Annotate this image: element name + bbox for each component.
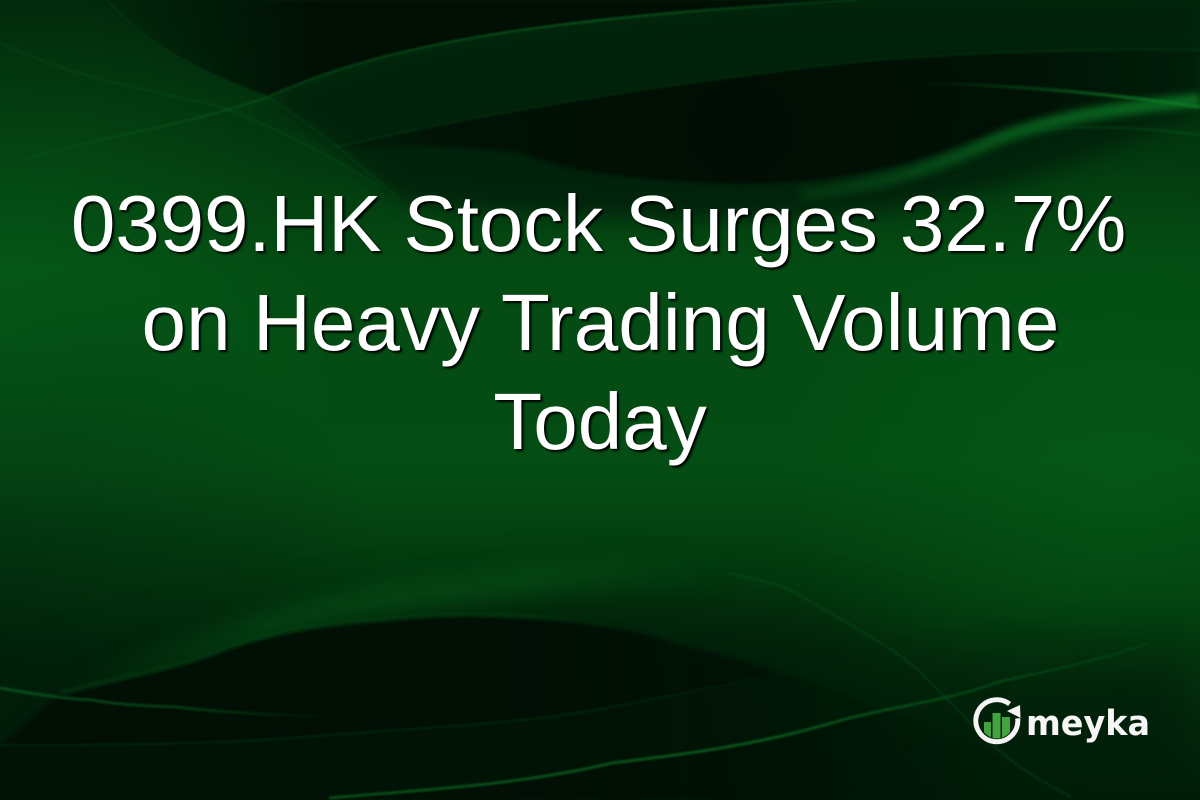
title: on Heavy Trading Volume bbox=[142, 278, 1059, 367]
title: 0399.HK Stock Surges 32.7% bbox=[71, 179, 1126, 268]
title bbox=[71, 179, 1126, 469]
wordmark: meyka bbox=[1026, 704, 1150, 744]
logo: meyka bbox=[973, 697, 1150, 744]
title: Today bbox=[493, 377, 707, 466]
icon: circular arrow with bars bbox=[972, 696, 1021, 745]
